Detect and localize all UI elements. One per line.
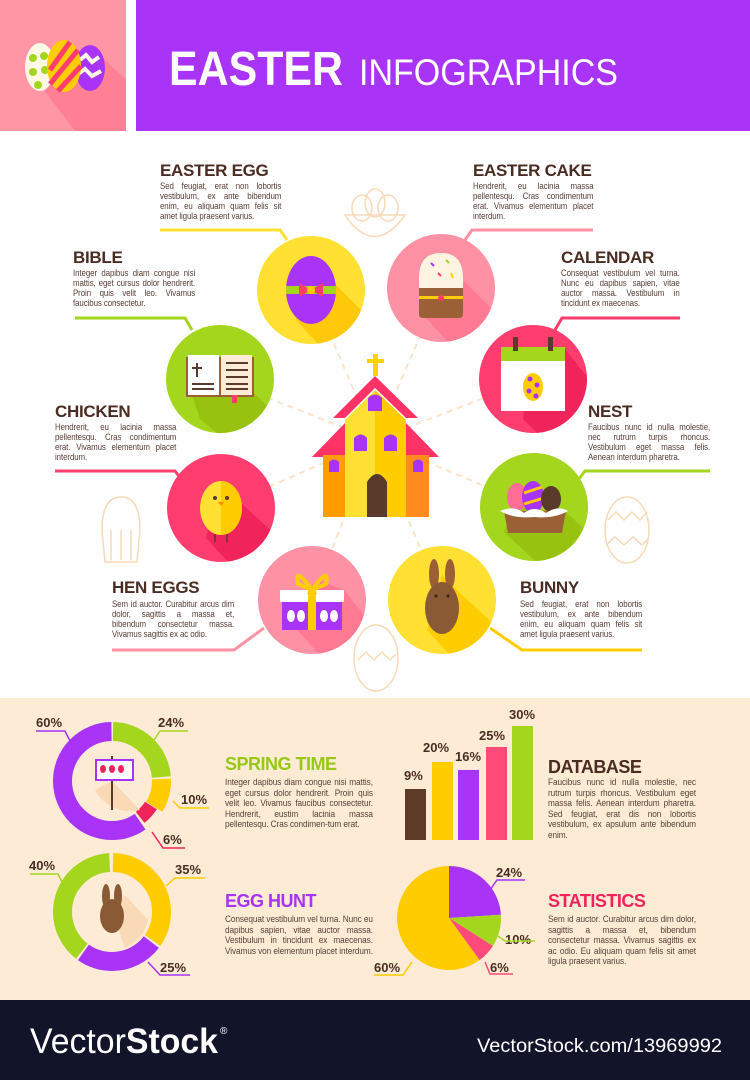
heading: egg hunt: EGG HUNT	[225, 891, 316, 911]
pie chart: statistics: 24%	[496, 865, 522, 880]
donut chart: spring time: 60%	[36, 715, 62, 730]
circle: bible	[166, 325, 274, 433]
bar chart: database: 25%	[479, 728, 505, 743]
text: bunny: Sed feugiat, erat non lobortis vestibulum, ex ante bibendum enim, eu aliquam quam felis sit amet ligula praesent varius.	[520, 599, 642, 639]
connector lines	[55, 230, 710, 650]
heading: calendar: CALENDAR	[561, 248, 654, 267]
church	[312, 354, 439, 517]
heading: bunny: BUNNY	[520, 578, 579, 597]
icon: eggs	[25, 40, 105, 92]
header: purple title banner	[136, 0, 750, 131]
text: hen eggs: Sem id auctor. Curabitur arcus dim dolor, sagittis a massa et, bibendum consectetur massa. Vivamus sagittis ex ac odio.	[112, 599, 234, 639]
circle: nest	[480, 453, 588, 561]
circle: easter egg	[257, 236, 365, 344]
text: calendar: Consequat vestibulum vel turna. Nunc eu dapibus sapien, vitae auctor massa. Vestibulum in tincidunt ex maecenas.	[561, 268, 680, 308]
footer	[0, 1000, 750, 1080]
bar chart: database: 20%	[423, 740, 449, 755]
text: database: Faucibus nunc id nulla molestie, nec rutrum turpis rhoncus. Vestibulum eget massa felis. Aenean interdum pharetra. Sed feugiat, erat dis non lobortis vestibulum, ex apsulum ante bibendum enim.	[548, 777, 696, 840]
circle: chicken	[167, 454, 275, 562]
donut chart: egg hunt	[29, 858, 205, 975]
bottom panel background	[0, 698, 750, 1000]
heading: statistics: STATISTICS	[548, 891, 645, 911]
heading: easter egg: EASTER EGG	[160, 161, 268, 180]
text: statistics: Sem id auctor. Curabitur arcus dim dolor, sagittis a massa et, bibendum consectetur massa. Vivamus sagittis ex ac odio. Eu aliquam quam felis sit amet ligula praesent varius.	[548, 914, 696, 967]
bar chart: database	[404, 707, 535, 840]
text: easter cake: Hendrerit, eu lacinia massa pellentesqu. Cras condimentum erat. Vivamus elementum placet interdum.	[473, 181, 593, 221]
header: pink icon panel	[0, 0, 126, 131]
heading: bible: BIBLE	[73, 248, 123, 267]
dashed rays from church	[220, 288, 534, 600]
pie chart: statistics: 10%	[505, 932, 531, 947]
pie chart: statistics: 6%	[490, 960, 509, 975]
donut chart: spring time: 10%	[181, 792, 207, 807]
donut chart: spring time: 24%	[158, 715, 184, 730]
bar chart: database: 16%	[455, 749, 481, 764]
header: purple title banner: INFOGRAPHICS	[359, 52, 618, 93]
footer: VectorStock.com/13969992	[477, 1036, 722, 1057]
footer: ®	[220, 1026, 228, 1037]
heading: hen eggs: HEN EGGS	[112, 578, 199, 597]
circle: hen eggs	[258, 546, 366, 654]
text: spring time: Integer dapibus diam congue nisi mattis, eget cursus dolor hendrerit. Proin quis velit leo. Vivamus faucibus consectetur. Hendrerit, eustim lacinia massa pellentesqu. Cras condimen-tum erat.	[225, 777, 373, 830]
heading: chicken: CHICKEN	[55, 402, 130, 421]
circle: calendar	[479, 325, 587, 433]
footer: VectorStock	[30, 1022, 219, 1061]
donut chart: egg hunt: 40%	[29, 858, 55, 873]
text: nest: Faucibus nunc id nulla molestie, nec rutrum turpis rhoncus. Vestibulum eget massa felis. Aenean interdum pharetra.	[588, 422, 710, 462]
decorative outline icons	[102, 189, 649, 691]
donut chart: spring time: 6%	[163, 832, 182, 847]
text: easter egg: Sed feugiat, erat non lobortis vestibulum, ex ante bibendum enim, eu aliquam quam felis sit amet ligula praesent varius.	[160, 181, 281, 221]
bar chart: database: 30%	[509, 707, 535, 722]
circle: easter cake	[387, 234, 495, 342]
heading: database: DATABASE	[548, 757, 641, 777]
text: egg hunt: Consequat vestibulum vel turna. Nunc eu dapibus sapien, vitae auctor massa. Vestibulum in tincidunt ex maecenas. Vivamus von elementum placet interdum.	[225, 914, 373, 956]
bar chart: database: 9%	[404, 768, 423, 783]
heading: easter cake: EASTER CAKE	[473, 161, 592, 180]
heading: spring time: SPRING TIME	[225, 754, 337, 774]
pie chart: statistics: 60%	[374, 960, 400, 975]
circle: bunny	[388, 546, 496, 654]
title: EASTER	[169, 43, 343, 96]
heading: nest: NEST	[588, 402, 632, 421]
pie chart: statistics	[374, 865, 535, 975]
text: chicken: Hendrerit, eu lacinia massa pellentesqu. Cras condimentum erat. Vivamus elementum placet interdum.	[55, 422, 176, 462]
donut chart: spring time	[36, 715, 209, 848]
donut chart: egg hunt: 35%	[175, 862, 201, 877]
donut chart: egg hunt: 25%	[160, 960, 186, 975]
text: bible: Integer dapibus diam congue nisi mattis, eget cursus dolor hendrerit. Proin quis velit leo. Vivamus faucibus consectetur.	[73, 268, 195, 308]
